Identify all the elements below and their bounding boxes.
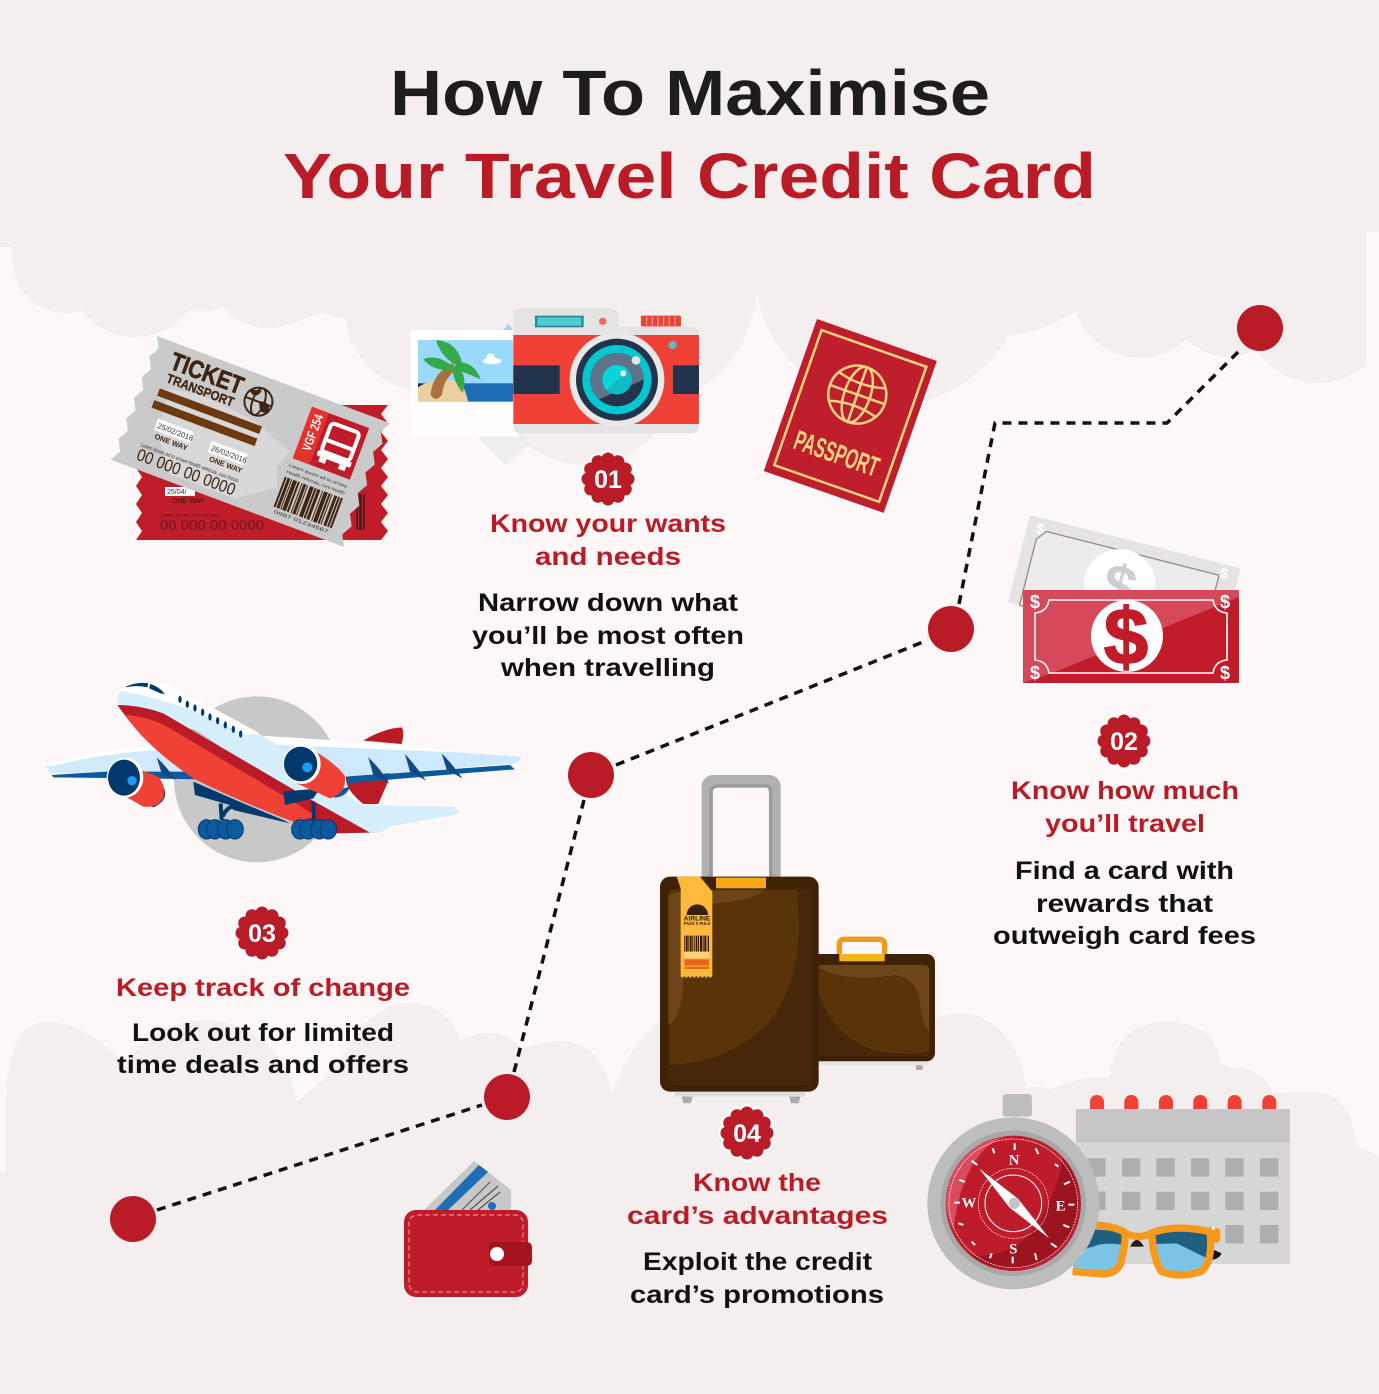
luggage tag: PASS X PULX <box>684 921 710 926</box>
step 01 badge <box>582 452 634 506</box>
icon: bus tickets: ONE WAY <box>153 432 189 452</box>
step 04 text <box>627 1169 888 1309</box>
icon: banknotes: $ <box>1104 592 1148 681</box>
compass: S <box>1009 1242 1017 1258</box>
icon: bus tickets: ONE WAY <box>208 454 243 475</box>
step 04 badge <box>720 1106 774 1160</box>
icon: bus tickets: Lorem ipsum ad to ornare <box>288 463 349 489</box>
suitcase handle <box>707 781 775 884</box>
icon: calendar, compass and sunglasses <box>927 1094 1290 1289</box>
step 01 text: Narrow down what <box>478 589 739 617</box>
icon: banknotes: $ <box>1034 520 1047 539</box>
step 02 text: rewards that <box>1036 890 1214 918</box>
icon: bus tickets: 25/04/ <box>167 489 187 496</box>
compass: W <box>962 1195 977 1211</box>
step 03 badge <box>236 906 288 960</box>
compass: N <box>1009 1153 1020 1169</box>
icon: luggage <box>660 781 935 1103</box>
sunglasses <box>1073 1225 1222 1275</box>
step 03 text: time deals and offers <box>117 1051 409 1079</box>
step 03 text <box>116 974 410 1079</box>
icon: bus tickets: 00 000 00 0000 <box>160 517 264 534</box>
step 02 badge <box>1098 714 1150 768</box>
title: Your Travel Credit Card <box>283 140 1096 212</box>
icon: bus tickets <box>111 336 390 547</box>
step 02 text <box>993 777 1256 950</box>
step 01 text: when travelling <box>500 654 715 682</box>
compass <box>927 1094 1099 1289</box>
icon: banknotes: $ <box>1220 663 1230 683</box>
dashed route line <box>157 348 1242 1210</box>
icon: bus tickets: Health vehicula, com health <box>286 469 346 496</box>
icon: banknotes: $ <box>1030 592 1040 612</box>
icon: bus tickets: 0987 01234567 <box>273 509 329 535</box>
icon: bus tickets: 26/02/2016 <box>210 443 248 465</box>
icon: passport <box>764 319 937 513</box>
step 02 text: Find a card with <box>1015 857 1234 885</box>
step 01 text: Know your wants <box>490 510 726 538</box>
step 02 text: outweigh card fees <box>993 922 1256 950</box>
icon: bus tickets: Lorem ipsum dolor sit amet <box>160 513 221 519</box>
icon: bus tickets: 00 000 00 0000 <box>134 445 238 499</box>
step 03 badge: 03 <box>248 920 276 948</box>
title: How To Maximise <box>390 57 990 129</box>
icon: banknotes: $ <box>1095 550 1144 623</box>
icon: passport: PASSPORT <box>790 424 883 483</box>
step 04 text: Exploit the credit <box>643 1248 873 1276</box>
step 01 text: and needs <box>535 543 681 571</box>
luggage tag <box>677 877 712 978</box>
briefcase <box>810 939 935 1070</box>
icon: bus tickets: TICKET <box>166 347 247 400</box>
route dots <box>110 305 1283 1242</box>
icon: airplane <box>45 681 521 862</box>
icon: banknotes: $ <box>1218 565 1230 583</box>
background: top cloud band <box>0 0 1379 465</box>
luggage tag: AIRLINE <box>684 916 710 922</box>
step 01 text: you’ll be most often <box>472 622 744 650</box>
icon: banknotes <box>1008 515 1240 683</box>
step 04 text: card’s promotions <box>630 1281 884 1309</box>
step 02 text: you’ll travel <box>1045 810 1205 838</box>
step 04 text: Know the <box>693 1169 821 1197</box>
title <box>283 57 1096 212</box>
step 02 badge: 02 <box>1110 728 1138 756</box>
background: bottom cloud band <box>0 1003 1379 1394</box>
step 03 text: Keep track of change <box>116 974 410 1002</box>
icon: wallet with card <box>404 1161 532 1297</box>
step 03 text: Look out for limited <box>132 1019 394 1047</box>
icon: bus tickets: TRANSPORT <box>164 371 236 410</box>
step 04 text: card’s advantages <box>627 1202 888 1230</box>
icon: camera and beach photo <box>411 308 699 437</box>
step 02 text: Know how much <box>1011 777 1239 805</box>
calendar <box>1076 1095 1290 1264</box>
icon: banknotes: $ <box>1030 663 1040 683</box>
suitcase body <box>660 877 819 1103</box>
icon: bus tickets: VGF 254 <box>299 412 326 453</box>
step 01 text <box>472 510 744 682</box>
icon: bus tickets: ONE WAY <box>172 498 205 505</box>
icon: bus tickets: 25/02/2016 <box>156 421 194 443</box>
icon: bus tickets: Lorem ipsum ad to ornare Health vehicula, com thesis <box>140 442 239 485</box>
step 04 badge: 04 <box>733 1120 761 1148</box>
step 01 badge: 01 <box>594 466 622 494</box>
icon: banknotes: $ <box>1220 592 1230 612</box>
compass: E <box>1056 1199 1066 1215</box>
